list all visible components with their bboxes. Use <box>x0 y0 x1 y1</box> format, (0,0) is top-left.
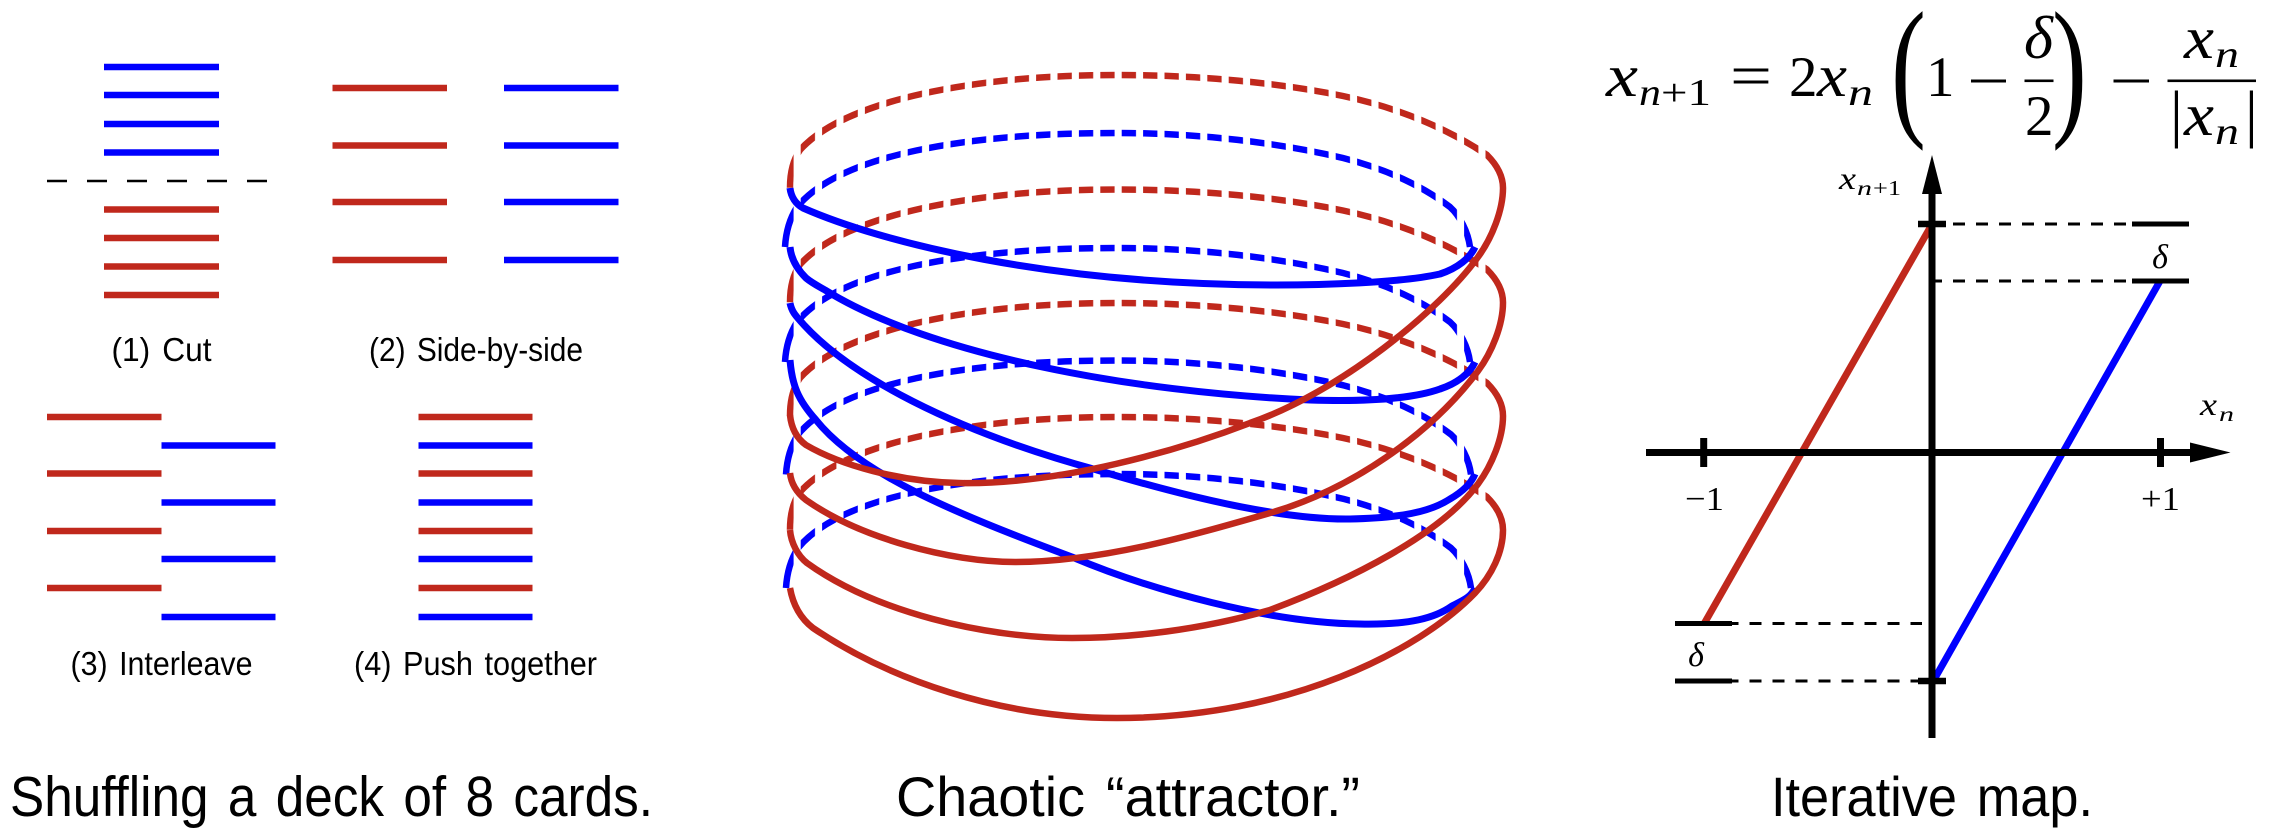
step 2: side-by-side <box>332 88 618 260</box>
caption: attractor: Chaotic “attractor.” <box>896 765 1360 828</box>
axis label: x n: n <box>2219 402 2234 426</box>
axis label: x n <box>2199 386 2234 426</box>
label: (4) Push together: (4) Push together <box>354 645 597 682</box>
solid lower curves: blue <box>790 188 1475 624</box>
dashed upper arcs: red <box>790 75 1503 530</box>
equation: x <box>2183 82 2214 148</box>
step 3: interleave <box>47 417 276 617</box>
chart: piecewise map <box>1646 155 2234 738</box>
tick label: +1: +1 <box>2141 481 2180 518</box>
x axis with arrow <box>1646 438 2230 467</box>
delta guides <box>1675 224 2189 681</box>
equation: n <box>2215 111 2239 153</box>
panel: shuffling a deck <box>10 67 653 829</box>
panel: iterative map <box>1605 0 2258 828</box>
map line: blue branch <box>1935 281 2160 678</box>
axis label: x n+1 <box>1838 160 1901 200</box>
axis label: x n+1: x <box>1838 160 1856 196</box>
equation: 2 <box>2025 85 2054 148</box>
equation <box>1605 0 2258 153</box>
axis label: x n+1: +1 <box>1873 176 1901 200</box>
label: (3) Interleave: (3) Interleave <box>70 645 252 682</box>
equation: n <box>1639 72 1661 114</box>
equation: x <box>1816 43 1847 109</box>
label: (2) Side-by-side: (2) Side-by-side <box>369 331 583 368</box>
caption: iterative map: Iterative map. <box>1771 765 2093 828</box>
equation: n <box>1848 72 1873 114</box>
label: (1) Cut: (1) Cut <box>112 331 212 368</box>
equation: n <box>2215 34 2239 76</box>
step 4: push together <box>418 417 532 617</box>
solid lower curves: red <box>790 188 1503 718</box>
equation: x <box>2183 5 2214 71</box>
equation: 2 <box>1789 46 1818 109</box>
equation: +1 <box>1661 72 1711 114</box>
equation: 1 <box>1926 46 1954 109</box>
dashed upper arcs: blue <box>785 133 1471 588</box>
equation: δ <box>2024 5 2054 71</box>
delta label: top: δ <box>2152 239 2169 276</box>
axis label: x n+1: n <box>1857 176 1872 200</box>
panel: chaotic attractor <box>785 75 1503 718</box>
equation: | <box>2245 78 2258 149</box>
tick label: -1: −1 <box>1685 481 1724 518</box>
caption: shuffling: Shuffling a deck of 8 cards. <box>10 765 653 829</box>
axis label: x n: x <box>2199 386 2217 422</box>
map line: red branch <box>1704 226 1931 623</box>
equation: = <box>1730 43 1772 109</box>
step 1: cut <box>47 67 268 295</box>
y axis with arrow <box>1918 155 1946 738</box>
equation: | <box>2170 78 2183 149</box>
delta label: bottom: δ <box>1688 637 1705 674</box>
equation: x <box>1605 43 1638 109</box>
